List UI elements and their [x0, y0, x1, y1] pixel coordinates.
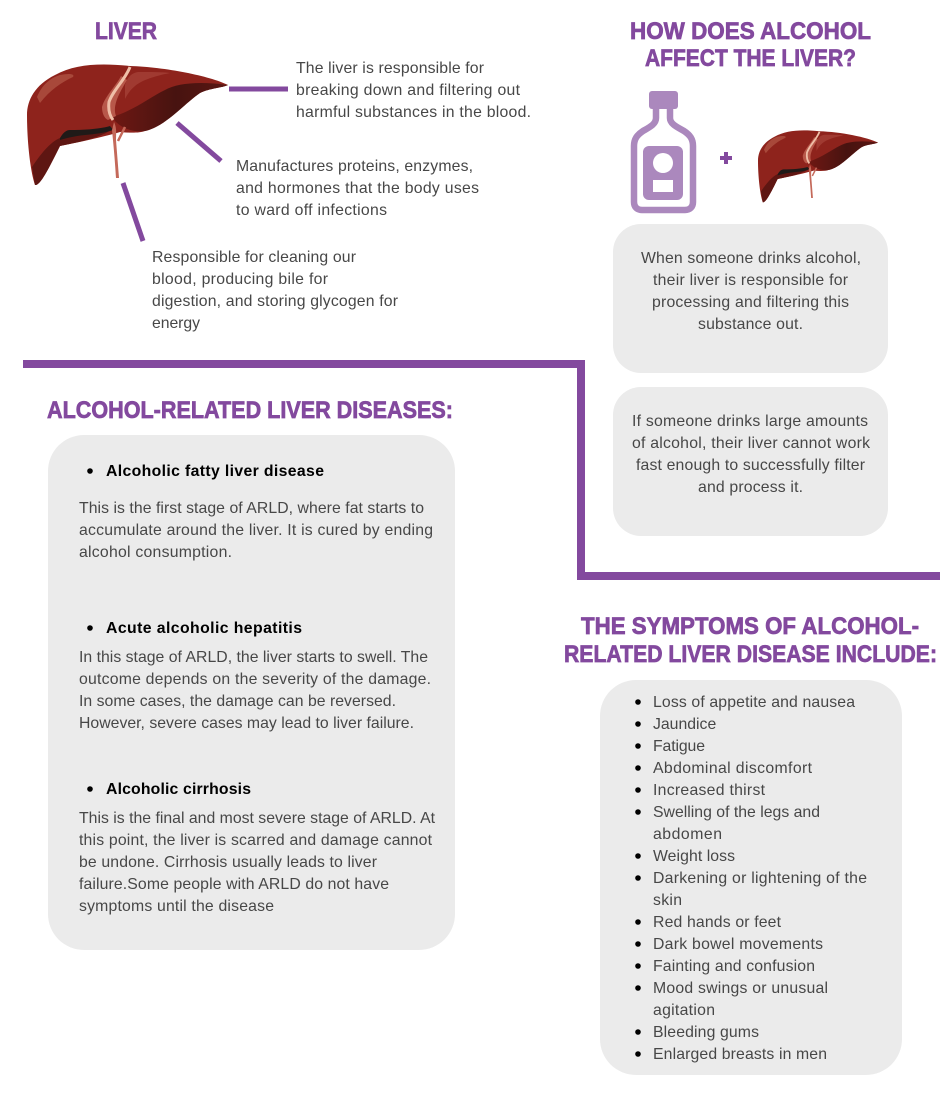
- disease: hepatitis: Acute alcoholic hepatitis: [106, 620, 302, 637]
- panel: symptoms list: Enlarged breasts in men: [653, 1046, 827, 1063]
- divider: purple section frame: [23, 364, 940, 576]
- icon: plus: [720, 152, 732, 164]
- panel: alcohol processing: [613, 224, 888, 373]
- panel: large amounts of alcohol: fast enough to successfully filter: [636, 457, 865, 474]
- panel: symptoms list: Fainting and confusion: [653, 958, 815, 975]
- disease: cirrhosis: symptoms until the disease: [79, 898, 274, 915]
- text: liver function filtering: harmful substances in the blood.: [296, 104, 531, 121]
- disease: cirrhosis: failure.Some people with ARLD do not have: [79, 876, 389, 893]
- connector line: top: [229, 86, 288, 92]
- text: liver function cleaning: Responsible for cleaning our: [152, 249, 356, 266]
- panel: symptoms list: Weight loss: [653, 848, 735, 865]
- panel: symptoms list: Red hands or feet: [653, 914, 782, 931]
- disease: fatty liver: alcohol consumption.: [79, 544, 232, 561]
- connector line: bottom: [123, 183, 143, 241]
- disease: cirrhosis: [79, 781, 436, 915]
- panel: symptoms list: Jaundice: [653, 716, 716, 733]
- illustration: liver: [27, 65, 228, 185]
- panel: symptoms list: agitation: [653, 1002, 715, 1019]
- connector line: middle: [177, 123, 221, 161]
- text: liver function filtering: [296, 60, 531, 121]
- heading: symptoms: [564, 613, 937, 668]
- panel: symptoms list: Swelling of the legs and: [653, 804, 820, 821]
- text: liver function cleaning: [152, 249, 398, 332]
- heading: how does alcohol affect the liver: [630, 18, 871, 72]
- panel: symptoms list: skin: [653, 892, 682, 909]
- text: liver function cleaning: blood, producing bile for: [152, 271, 328, 288]
- text: liver function manufacturing: [236, 158, 479, 219]
- illustration: small liver: [758, 130, 878, 202]
- text: liver function manufacturing: to ward off infections: [236, 202, 387, 219]
- text: liver function cleaning: energy: [152, 315, 200, 332]
- disease: hepatitis: outcome depends on the severity of the damage.: [79, 671, 431, 688]
- panel: symptoms list: Loss of appetite and nausea: [653, 694, 855, 711]
- panel: symptoms list: Dark bowel movements: [653, 936, 823, 953]
- disease: cirrhosis: be undone. Cirrhosis usually leads to liver: [79, 854, 377, 871]
- panel: symptoms list: Fatigue: [653, 738, 705, 755]
- heading: how does alcohol affect the liver: HOW DOES ALCOHOL: [630, 18, 871, 45]
- panel: symptoms list: [600, 680, 902, 1075]
- panel: large amounts of alcohol: [613, 387, 888, 536]
- panel: symptoms list: Bleeding gums: [653, 1024, 759, 1041]
- disease: fatty liver: This is the first stage of ARLD, where fat starts to: [79, 500, 424, 517]
- text: liver function filtering: The liver is responsible for: [296, 60, 484, 77]
- title: liver: LIVER: [95, 18, 157, 45]
- disease: cirrhosis: This is the final and most severe stage of ARLD. At: [79, 810, 436, 827]
- panel: alcohol processing: processing and filtering this: [652, 294, 849, 311]
- disease: fatty liver: Alcoholic fatty liver disease: [106, 463, 324, 480]
- panel: large amounts of alcohol: of alcohol, their liver cannot work: [632, 435, 870, 452]
- panel: alcohol processing: their liver is responsible for: [653, 272, 848, 289]
- panel: large amounts of alcohol: If someone drinks large amounts: [632, 413, 868, 430]
- text: liver function manufacturing: and hormones that the body uses: [236, 180, 479, 197]
- text: liver function manufacturing: Manufactures proteins, enzymes,: [236, 158, 473, 175]
- panel: symptoms list: Abdominal discomfort: [653, 760, 813, 777]
- heading: how does alcohol affect the liver: AFFECT THE LIVER?: [645, 45, 856, 72]
- text: liver function filtering: breaking down and filtering out: [296, 82, 521, 99]
- disease: hepatitis: In this stage of ARLD, the liver starts to swell. The: [79, 649, 428, 666]
- text: liver function cleaning: digestion, and storing glycogen for: [152, 293, 398, 310]
- panel: symptoms list: abdomen: [653, 826, 722, 843]
- panel: alcohol processing: When someone drinks alcohol,: [641, 250, 861, 267]
- panel: symptoms list: Increased thirst: [653, 782, 766, 799]
- panel: symptoms list: Darkening or lightening of the: [653, 870, 867, 887]
- disease: cirrhosis: Alcoholic cirrhosis: [106, 781, 251, 798]
- heading: alcohol-related liver diseases: ALCOHOL-RELATED LIVER DISEASES:: [47, 397, 453, 424]
- panel: large amounts of alcohol: and process it.: [698, 479, 803, 496]
- disease: cirrhosis: this point, the liver is scarred and damage cannot: [79, 832, 433, 849]
- panel: alcohol processing: substance out.: [698, 316, 803, 333]
- panel: liver diseases: [48, 435, 455, 950]
- heading: symptoms: THE SYMPTOMS OF ALCOHOL-: [581, 613, 919, 640]
- disease: hepatitis: [79, 620, 431, 732]
- disease: fatty liver: accumulate around the liver. It is cured by ending: [79, 522, 433, 539]
- disease: hepatitis: In some cases, the damage can be reversed.: [79, 693, 396, 710]
- disease: hepatitis: However, severe cases may lead to liver failure.: [79, 715, 414, 732]
- icon: alcohol bottle: [634, 91, 693, 210]
- disease: fatty liver: [79, 463, 433, 561]
- panel: symptoms list: Mood swings or unusual: [653, 980, 828, 997]
